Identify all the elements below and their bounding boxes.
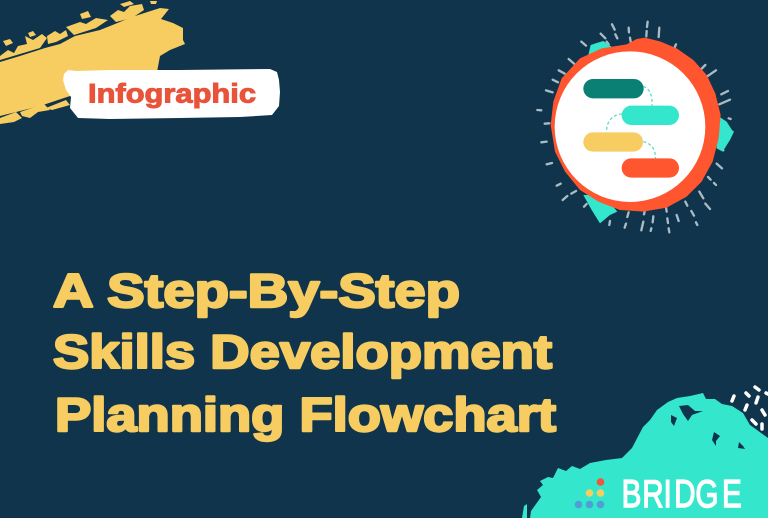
title: Planning Flowchart bbox=[55, 388, 556, 441]
logo wordmark: BRIDGE bbox=[622, 473, 742, 516]
icon: white disc bbox=[555, 51, 705, 202]
yellow brush stroke bbox=[0, 1, 185, 124]
white flecks bbox=[732, 387, 768, 429]
icon: flowchart badge bbox=[537, 22, 734, 232]
icon: teal blob behind ring bbox=[583, 41, 734, 223]
title: Skills Development bbox=[53, 325, 552, 378]
label text: Infographic: Infographic bbox=[88, 78, 256, 108]
teal brush corner bbox=[522, 387, 768, 518]
icon: radiating ticks bbox=[537, 22, 731, 232]
title: A Step-By-Step bbox=[53, 264, 460, 317]
white brush label bbox=[63, 69, 280, 119]
title bbox=[53, 264, 556, 441]
logo: Bridge bbox=[575, 473, 742, 516]
icon: flowchart pills bbox=[583, 79, 679, 178]
icon: orange ring bbox=[551, 38, 721, 212]
logo mark: dots bbox=[575, 478, 604, 508]
icon: dashed connectors bbox=[607, 86, 655, 158]
brush flecks bbox=[671, 405, 745, 449]
